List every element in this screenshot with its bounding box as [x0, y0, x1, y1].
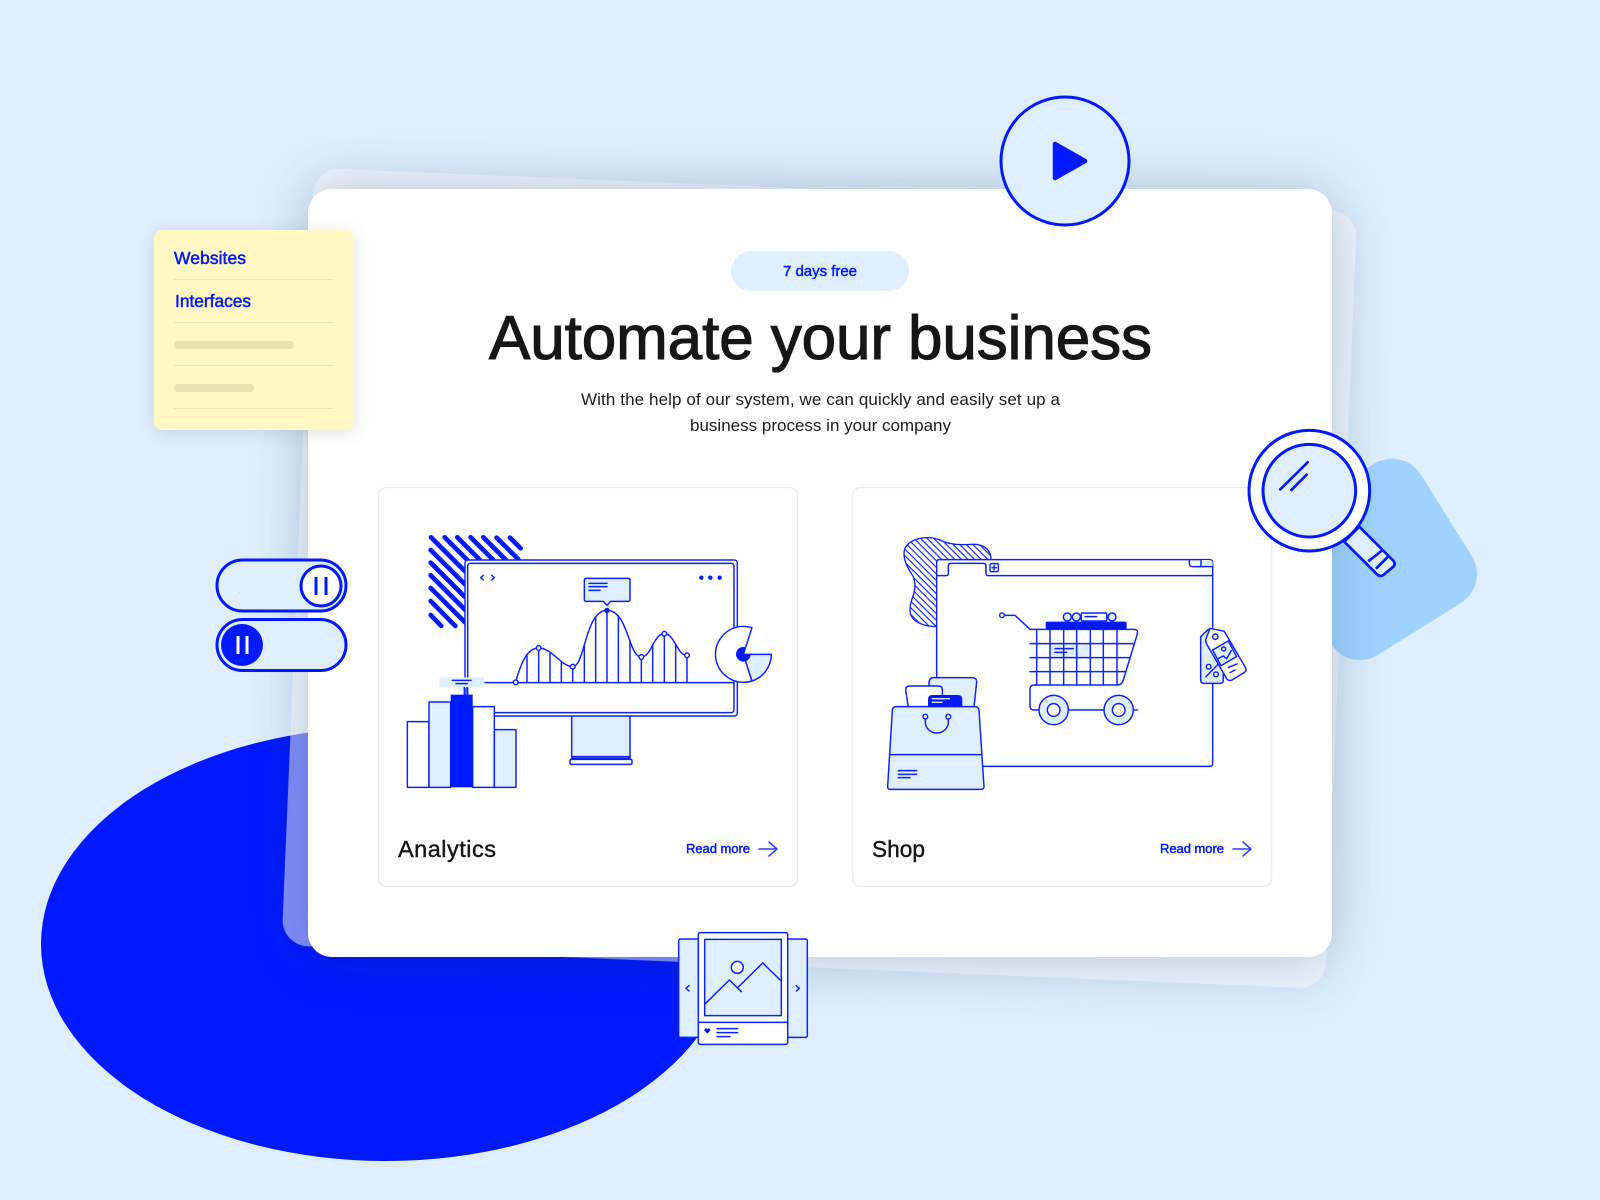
- illustration: analytics monitor: [407, 537, 771, 787]
- blue ellipse backdrop: [41, 727, 731, 1161]
- label: Analytics: Analytics: [398, 836, 496, 862]
- panel: yellow note: Interfaces: [175, 291, 251, 311]
- title: Automate your business: [489, 304, 1152, 373]
- link: Read more: Read more: [1160, 841, 1224, 856]
- icon: arrow: [759, 842, 777, 856]
- label: Shop: Shop: [872, 836, 925, 862]
- panel: yellow note: [154, 230, 354, 430]
- line chart with drop lines: [513, 608, 689, 685]
- badge: 7 days free: [731, 251, 909, 291]
- shopping bag: [888, 678, 984, 789]
- toggle: on: [217, 620, 346, 670]
- chart tooltip: [584, 578, 630, 605]
- pie chart: [715, 626, 771, 682]
- illustration: shop browser: [888, 538, 1246, 789]
- monitor: [465, 560, 737, 764]
- hatched blob: [904, 538, 991, 627]
- icon: arrow: [1233, 842, 1251, 856]
- image carousel: [679, 933, 807, 1044]
- subtitle: [581, 390, 1061, 435]
- subtitle: With the help of our system, we can quickly and easily set up a: [581, 390, 1061, 409]
- badge: 7 days free: 7 days free: [783, 263, 857, 280]
- light blue rounded diamond: [1262, 446, 1490, 673]
- subtitle: business process in your company: [690, 416, 952, 435]
- price tags: [1201, 628, 1246, 683]
- browser window: [937, 560, 1213, 766]
- panel: analytics card: [378, 488, 798, 886]
- icon: play button: [1001, 97, 1129, 225]
- panel: yellow note: Websites: [174, 248, 246, 268]
- panel: main white card: [308, 189, 1332, 957]
- panel: shop card: [852, 488, 1272, 886]
- bar chart: [407, 677, 516, 787]
- toggle: off: [217, 560, 346, 611]
- striped square: [431, 537, 521, 626]
- icon: magnifier: [1249, 430, 1395, 576]
- tilted back sheet: [282, 168, 1357, 989]
- shopping cart: [1000, 613, 1138, 725]
- link: Read more: Read more: [686, 841, 750, 856]
